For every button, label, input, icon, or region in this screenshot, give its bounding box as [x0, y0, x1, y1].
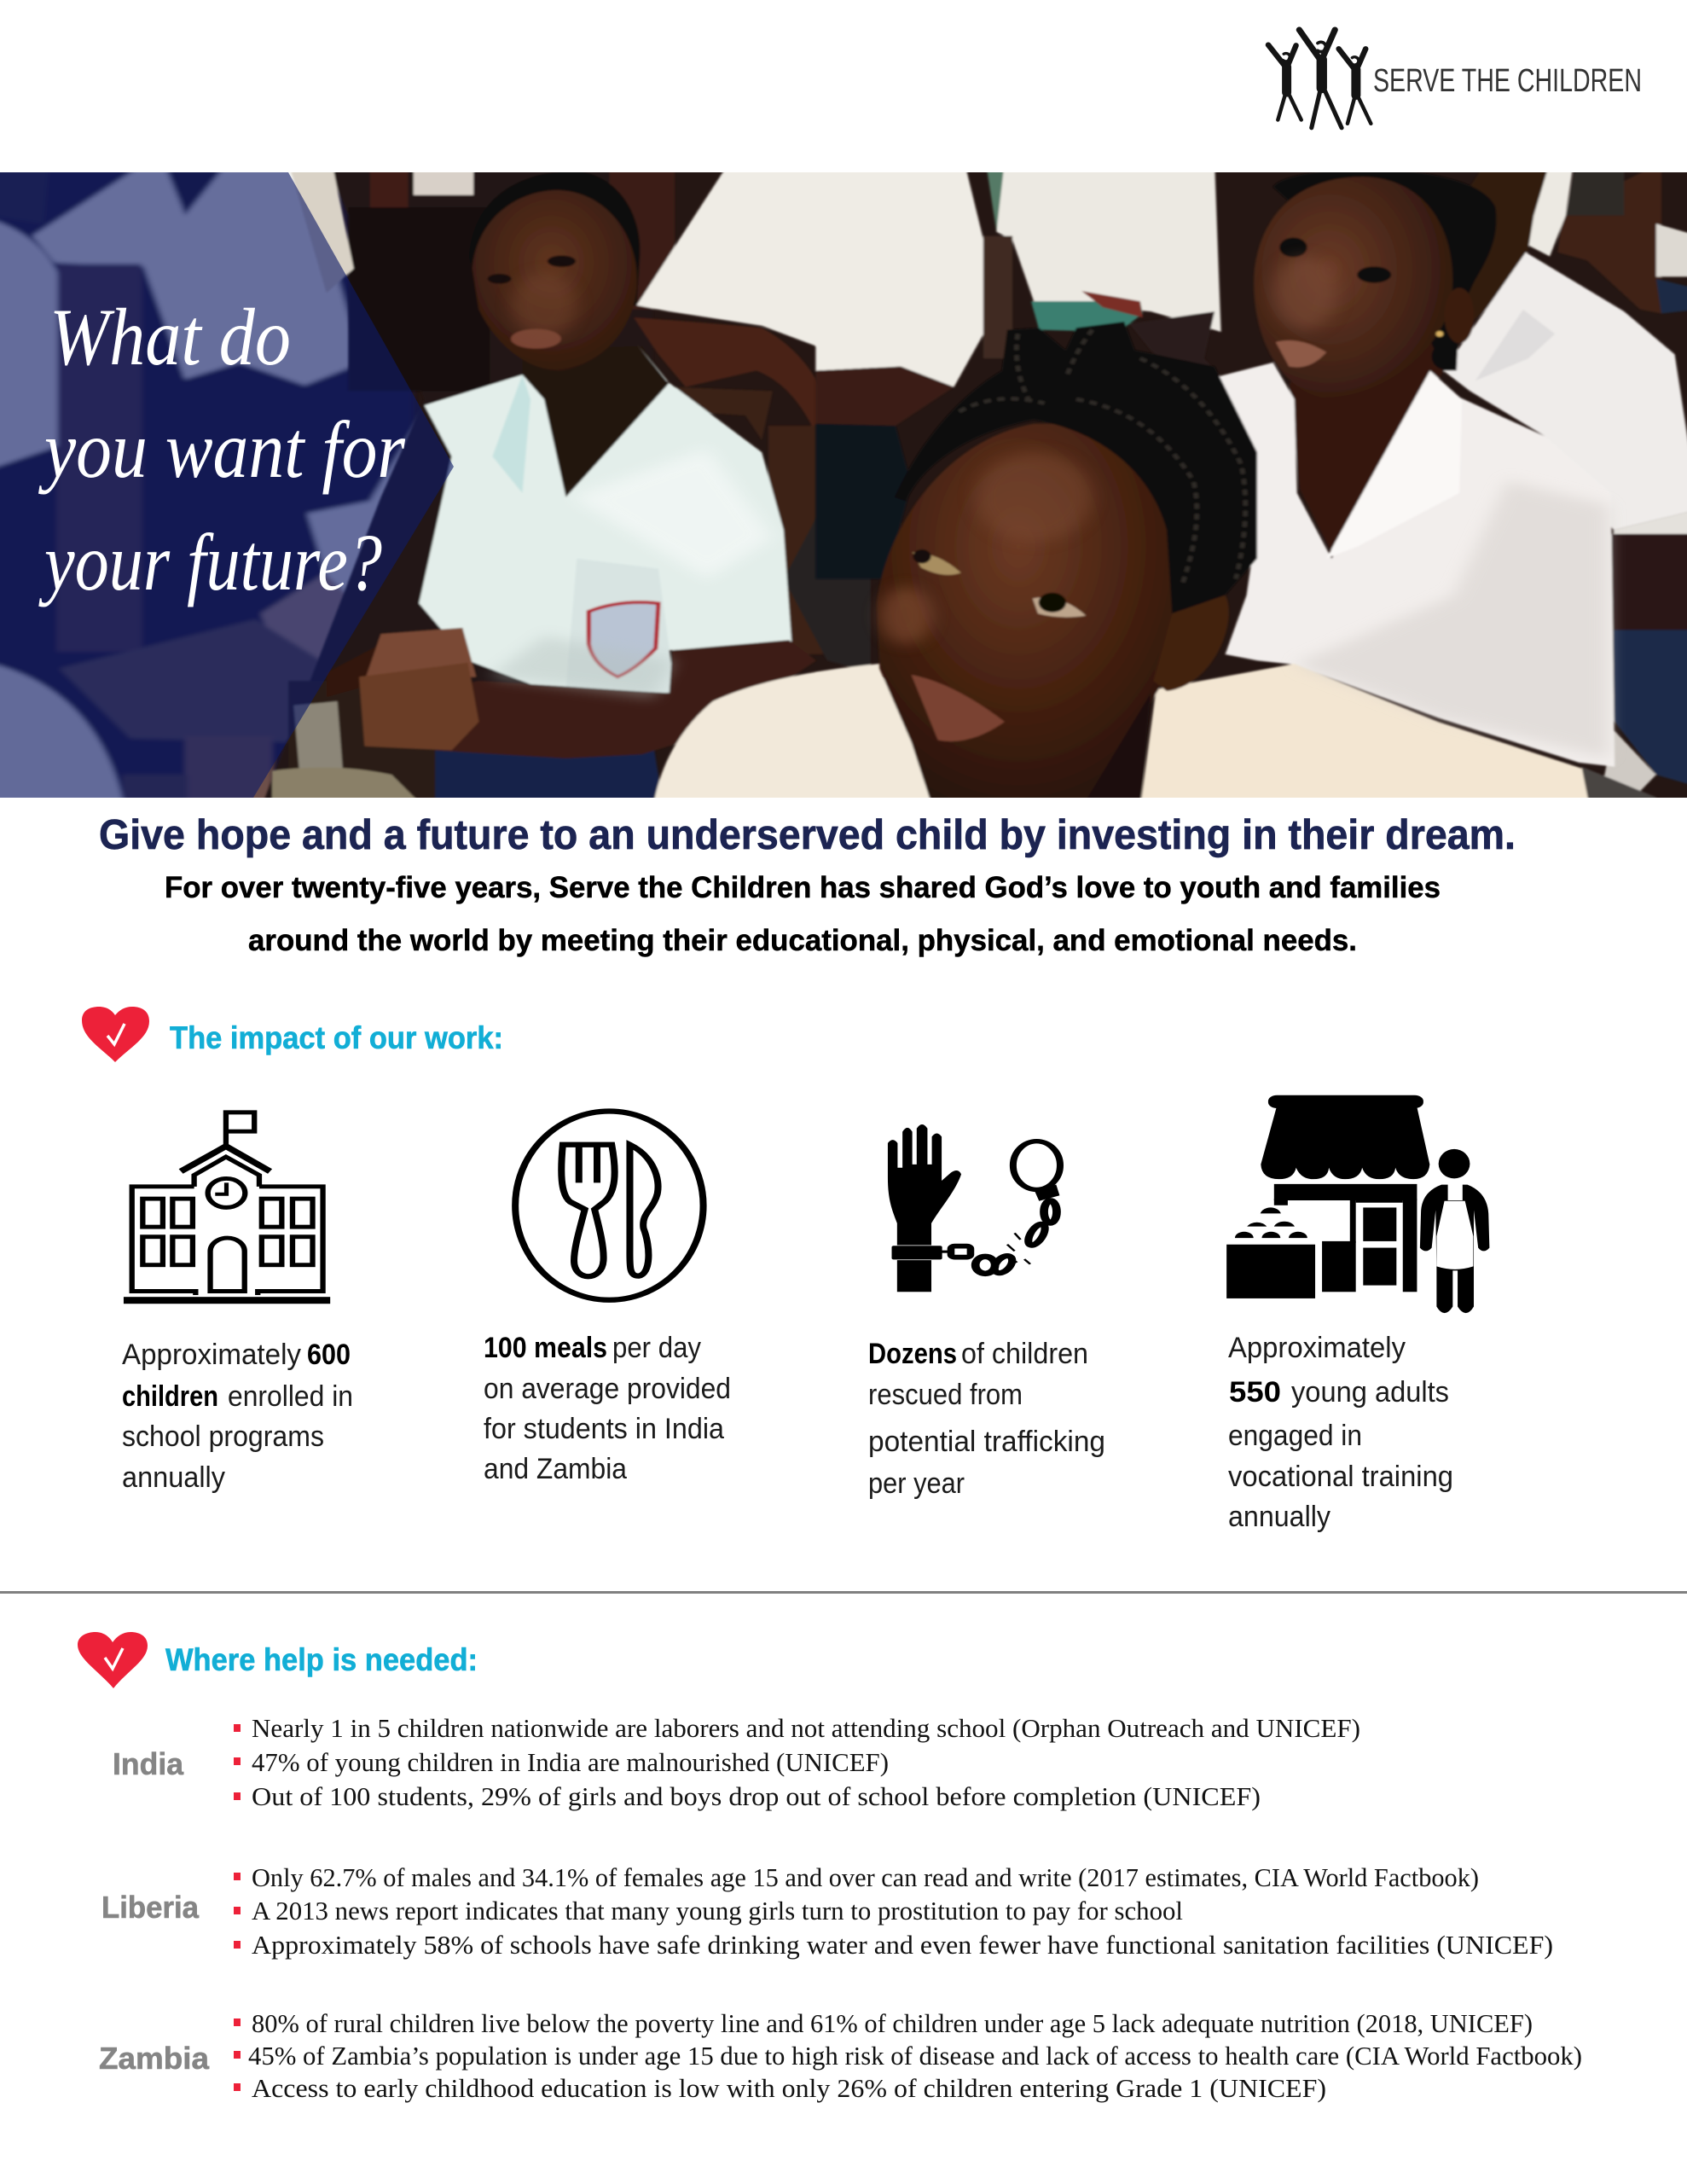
country block: Liberia — [101, 1862, 1553, 1960]
bullet squares — [234, 1724, 241, 1800]
photo painting: right half — [815, 162, 1687, 807]
text: young adults in vocational training: young adults — [1291, 1376, 1449, 1409]
top-right shirt and arm — [636, 162, 892, 375]
girl one: face — [472, 190, 637, 370]
text: meals per day: per day — [612, 1332, 701, 1364]
hero question: What do you want for your future? — [38, 292, 406, 607]
foreground girl: shirt — [815, 671, 932, 798]
Liberia facts: A 2013 news report indicates that many young girls turn to prostitution to pay for school — [252, 1896, 1183, 1926]
text: young adults in vocational training: 550 — [1229, 1376, 1281, 1409]
front girl shoulder — [653, 663, 892, 807]
skirt — [434, 749, 660, 798]
Liberia facts: Only 62.7% of males and 34.1% of females age 15 and over can read and write (2017 estimates, CIA World Factbook) — [252, 1862, 1479, 1892]
country label: Liberia: Liberia — [101, 1890, 200, 1925]
Zambia facts: Access to early childhood education is low with only 26% of children entering Grade 1 (UNICEF) — [252, 2073, 1326, 2103]
text: children rescued: per year — [868, 1467, 965, 1500]
hero question: What do you want for your future?: What do — [49, 292, 291, 382]
text: young adults in vocational training: Approximately — [1228, 1332, 1406, 1364]
text: meals per day: for students in India — [484, 1413, 724, 1445]
foreground girl: hair — [895, 322, 1257, 613]
heading: the impact of our work: The impact of our work: — [170, 1020, 503, 1055]
right back person — [1441, 172, 1549, 372]
right background — [1557, 162, 1661, 313]
icon: three figures with raised arms — [1268, 30, 1371, 128]
text: children rescued — [868, 1338, 1105, 1500]
navy chevron overlay — [0, 172, 454, 798]
patterned bag — [270, 766, 417, 798]
text: young adults in vocational training — [1228, 1332, 1453, 1533]
India facts: Out of 100 students, 29% of girls and boys drop out of school before completion (UNICEF) — [252, 1781, 1261, 1811]
text: children enrolled: school programs — [122, 1420, 324, 1453]
hero question: What do you want for your future?: your future? — [38, 517, 382, 607]
icon: heart with check (impact) — [82, 1007, 149, 1062]
girl one: shirt — [419, 344, 791, 693]
Zambia facts: 45% of Zambia’s population is under age 15 due to high risk of disease and lack of access to health care (CIA World Factbook) — [248, 2041, 1582, 2071]
arm left — [815, 367, 954, 426]
text: children rescued: potential trafficking — [868, 1426, 1105, 1458]
headline: Give hope and a future to an underserved child by investing in their dream. — [99, 812, 1516, 858]
text: children enrolled: Approximately — [122, 1339, 301, 1371]
intro paragraph: around the world by meeting their educational, physical, and emotional needs. — [248, 924, 1357, 957]
text: children enrolled: children — [122, 1380, 218, 1413]
Zambia facts — [248, 2008, 1582, 2103]
icon: shop with vendor — [1226, 1095, 1489, 1313]
girl one: arm and hands — [425, 640, 816, 758]
photo painting: under the navy overlay — [0, 172, 415, 798]
icon: plate with fork and knife — [515, 1112, 704, 1300]
girl two: face — [1254, 177, 1452, 398]
text: children rescued: rescued from — [868, 1379, 1023, 1411]
icon: heart with check (help) — [78, 1632, 148, 1688]
icon: raised hand with broken chain — [888, 1124, 1060, 1292]
India facts — [252, 1713, 1360, 1811]
foreground girl: face — [877, 423, 1172, 807]
photo painting: background, left half — [261, 162, 892, 807]
intro paragraph — [165, 871, 1441, 957]
girl two: neck — [1289, 334, 1443, 559]
text: young adults in vocational training: engaged in — [1228, 1420, 1362, 1452]
text: children enrolled: enrolled in — [228, 1380, 353, 1413]
intro paragraph: For over twenty-five years, Serve the Children has shared God’s love to youth and families — [165, 871, 1441, 904]
icon: school building — [124, 1112, 330, 1304]
hero question: What do you want for your future?: you want for — [38, 404, 406, 495]
foreground girl: ear — [1153, 595, 1229, 691]
girl two: shirt — [1217, 363, 1615, 767]
India facts: 47% of young children in India are malnourished (UNICEF) — [252, 1747, 889, 1777]
text: meals per day: 100 meals — [484, 1332, 607, 1364]
heading: where help is needed: Where help is needed: — [165, 1642, 478, 1677]
girl one: hair and neck — [469, 171, 640, 305]
text: children enrolled: annually — [122, 1461, 225, 1494]
text: children rescued: of children — [961, 1338, 1088, 1370]
photo painting: soft shading, left — [490, 273, 773, 697]
country block: India — [113, 1713, 1360, 1811]
girl two: hair — [1272, 172, 1497, 372]
bullet squares — [234, 2018, 241, 2091]
text: young adults in vocational training: vocational training — [1228, 1461, 1453, 1493]
back shirts — [815, 162, 988, 387]
India facts: Nearly 1 in 5 children nationwide are laborers and not attending school (Orphan Outreach and UNICEF) — [252, 1713, 1360, 1743]
text: children enrolled: 600 — [307, 1339, 351, 1371]
lower chair — [288, 681, 435, 804]
foreground girl: eyes and mouth — [913, 552, 961, 575]
text: children enrolled — [122, 1339, 353, 1494]
text: children rescued: Dozens — [868, 1338, 957, 1370]
text: meals per day: and Zambia — [484, 1453, 627, 1485]
logo: Serve the Children — [1268, 30, 1642, 128]
country block: Zambia — [99, 2008, 1582, 2103]
text: meals per day: on average provided — [484, 1373, 731, 1405]
bottom right wood and jeans — [1614, 509, 1687, 536]
school badge — [588, 602, 658, 677]
Liberia facts: Approximately 58% of schools have safe drinking water and even fewer have functional sanitation facilities (UNICEF) — [252, 1930, 1553, 1960]
text: meals per day — [484, 1332, 731, 1485]
country label: India: India — [113, 1746, 184, 1781]
bullet squares — [234, 1873, 241, 1949]
country label: Zambia: Zambia — [99, 2041, 210, 2076]
hero photo: students in a classroom — [0, 162, 1687, 807]
Zambia facts: 80% of rural children live below the poverty line and 61% of children under age 5 lack adequate nutrition (2018, UNICEF) — [252, 2008, 1533, 2038]
text: young adults in vocational training: annually — [1228, 1501, 1330, 1533]
photo painting: soft shading, right — [879, 256, 1609, 758]
Liberia facts — [252, 1862, 1553, 1960]
